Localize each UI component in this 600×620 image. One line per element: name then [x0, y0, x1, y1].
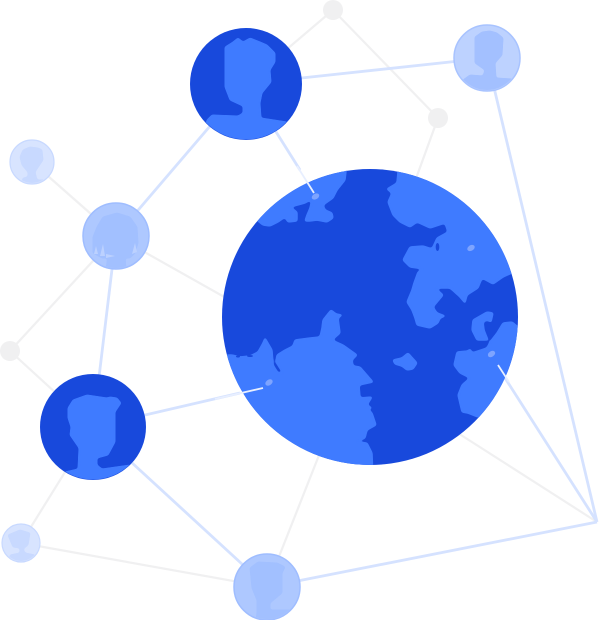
land: top left — [258, 170, 347, 226]
avatar: top right — [454, 25, 520, 100]
blue connection lines — [93, 58, 597, 587]
globe location markers — [264, 192, 496, 387]
avatar: bottom left small — [2, 524, 40, 565]
land: right small inlet — [472, 312, 493, 340]
globe — [215, 166, 518, 465]
hair strand highlights — [94, 243, 137, 258]
grey dot nodes — [0, 0, 448, 361]
avatar: left small — [10, 140, 54, 190]
avatar: lower left — [40, 374, 146, 490]
land: bottom — [227, 310, 376, 465]
land: middle island — [393, 353, 417, 370]
white link segments on globe — [215, 166, 509, 399]
small dark specks on land — [236, 243, 439, 358]
avatar: top centre — [190, 28, 302, 150]
land: top right — [387, 172, 512, 328]
land: right — [454, 322, 518, 418]
avatar: bottom centre — [234, 554, 300, 620]
avatar: left medium — [83, 203, 149, 270]
